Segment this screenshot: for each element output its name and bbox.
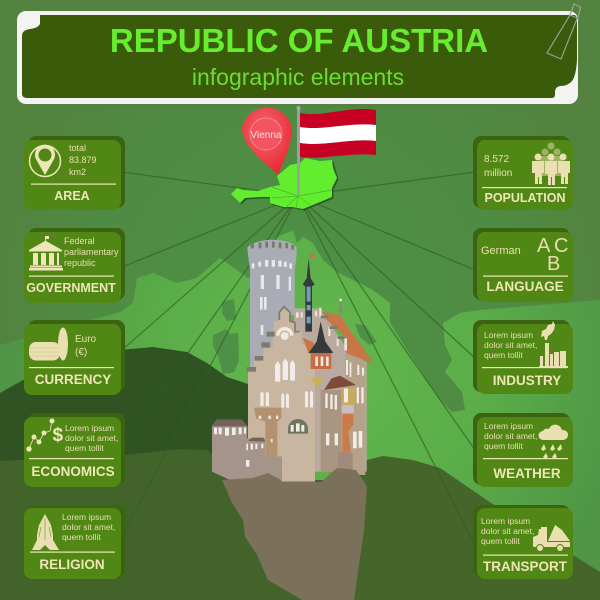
label: economics: ECONOMICS — [31, 464, 115, 479]
economics text: dolor sit amet, — [65, 433, 118, 443]
transport text: quem tollit — [481, 536, 520, 546]
government text: Federal — [64, 236, 95, 246]
industry text: dolor sit amet, — [484, 340, 537, 350]
panel: economics — [24, 413, 125, 487]
panel: population — [473, 136, 573, 210]
icon: paper clip — [547, 4, 580, 59]
panel: government — [24, 228, 125, 303]
panel: industry — [473, 320, 573, 394]
population text: 8.572 — [484, 154, 509, 165]
population text: million — [484, 168, 512, 179]
industry text: Lorem ipsum — [484, 330, 533, 340]
area text: 83.879 — [69, 155, 97, 165]
icon: people — [532, 142, 570, 185]
tower — [247, 240, 297, 315]
icon: chart with dollar — [27, 419, 54, 451]
currency text: Euro — [75, 334, 97, 345]
industry text: quem tollit — [484, 350, 523, 360]
weather text: Lorem ipsum — [484, 421, 533, 431]
area text: total — [69, 143, 86, 153]
banner inner — [22, 15, 577, 98]
radiating lines — [122, 172, 475, 545]
icon: rain cloud — [538, 425, 568, 459]
hills — [0, 347, 600, 600]
icon: location pin — [30, 145, 60, 176]
panel: religion — [24, 505, 125, 579]
lower left wing — [212, 420, 282, 482]
main building back — [294, 308, 367, 472]
label: population: POPULATION — [484, 191, 566, 205]
icon: letters: B — [547, 253, 560, 275]
flag pole — [296, 106, 300, 196]
right bay — [324, 376, 356, 390]
government text: republic — [64, 258, 96, 268]
label: language: LANGUAGE — [486, 279, 564, 294]
rock — [222, 468, 367, 600]
language text: German — [481, 245, 521, 257]
weather text: dolor sit amet, — [484, 431, 537, 441]
weather text: quem tollit — [484, 441, 523, 451]
spire — [303, 258, 315, 332]
subtitle: infographic elements — [192, 64, 404, 90]
icon: coins — [29, 328, 68, 360]
small bastion — [338, 451, 353, 470]
map of Europe — [0, 230, 600, 600]
gable windows — [275, 358, 295, 382]
side turret — [254, 408, 281, 457]
header banner — [17, 4, 580, 104]
religion text: quem tollit — [62, 532, 101, 542]
currency text: (€) — [75, 347, 87, 358]
label: transport: TRANSPORT — [483, 559, 568, 574]
icon: letters: A — [537, 235, 551, 257]
label: religion: RELIGION — [39, 557, 105, 572]
main gable — [248, 307, 315, 482]
finial — [339, 300, 343, 312]
panel: currency — [24, 320, 125, 395]
economics text: quem tollit — [65, 443, 104, 453]
economics text: Lorem ipsum — [65, 423, 114, 433]
panel: area — [24, 136, 125, 210]
flag of Austria — [300, 109, 376, 158]
pin: Vienna: Vienna — [251, 130, 282, 141]
government text: parliamentary — [64, 247, 119, 257]
icon: factory — [539, 321, 568, 368]
label: weather: WEATHER — [493, 466, 561, 481]
panel: language — [473, 228, 573, 302]
map of Austria — [231, 158, 338, 210]
small dark turret — [309, 322, 333, 353]
arched window — [288, 419, 308, 434]
icon: letters: C — [554, 235, 568, 257]
label: currency: CURRENCY — [35, 372, 111, 387]
transport text: dolor sit amet, — [481, 526, 534, 536]
roof — [322, 312, 373, 363]
title: REPUBLIC OF AUSTRIA — [110, 22, 488, 59]
castle — [212, 240, 373, 482]
religion text: Lorem ipsum — [62, 512, 111, 522]
panel: weather — [473, 413, 573, 487]
rose window — [276, 327, 293, 336]
icon: classical building — [29, 236, 63, 270]
icon: praying hands — [32, 514, 59, 550]
label: government: GOVERNMENT — [26, 281, 116, 295]
label: industry: INDUSTRY — [493, 373, 561, 388]
panel: economics: $ — [52, 425, 64, 446]
pin: Vienna — [242, 108, 292, 175]
gable caps — [296, 308, 347, 350]
area text: km2 — [69, 167, 86, 177]
panel: transport — [473, 505, 573, 579]
label: area: AREA — [54, 189, 90, 203]
religion text: dolor sit amet, — [62, 522, 115, 532]
icon: dump truck — [533, 525, 570, 552]
transport text: Lorem ipsum — [481, 516, 530, 526]
